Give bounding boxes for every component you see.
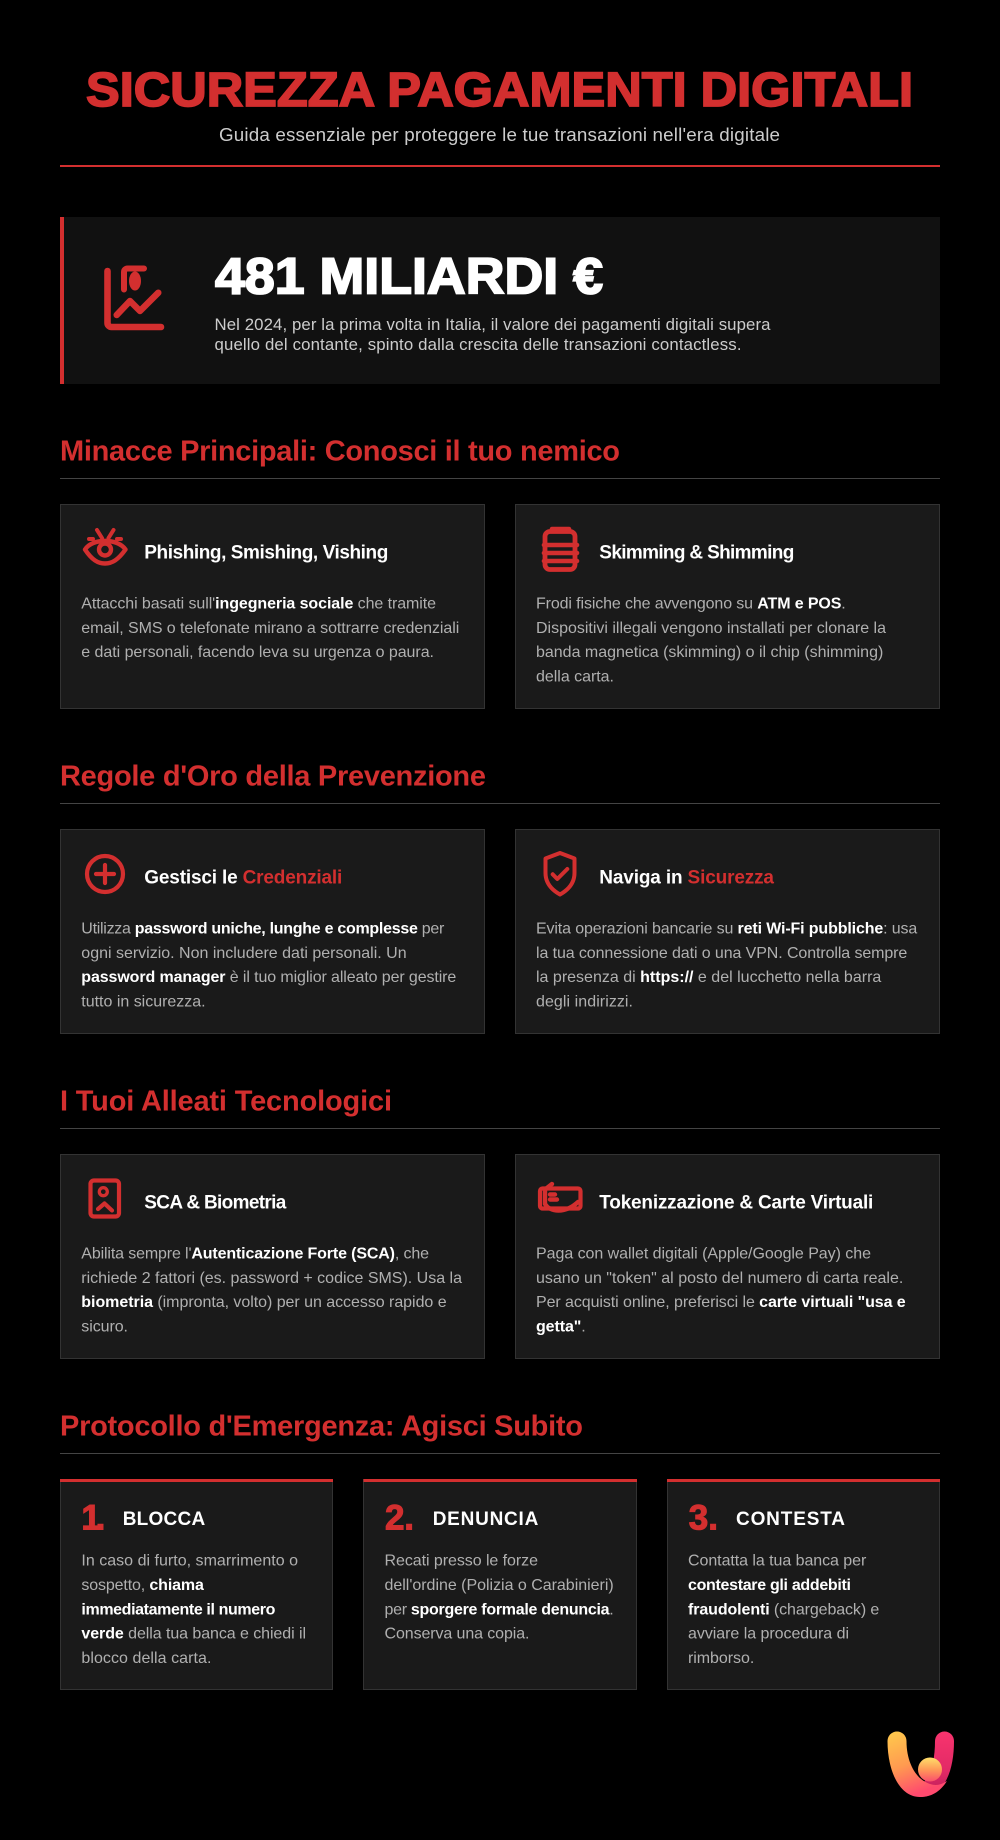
step heading: CONTESTA <box>736 1509 845 1530</box>
step text <box>384 1553 614 1643</box>
step text: avviare la procedura di <box>688 1626 849 1643</box>
panel: step 1 block <box>60 1479 333 1690</box>
step text: blocco della carta. <box>81 1650 211 1667</box>
heading: threats section: Minacce Principali: Conosci il tuo nemico <box>60 436 620 468</box>
card text: email, SMS o telefonate mirano a sottrarre credenziali <box>81 620 459 637</box>
card text <box>81 596 459 661</box>
header <box>60 64 940 167</box>
subtitle: Guida essenziale per proteggere le tue transazioni nell'era digitale <box>219 124 780 145</box>
icon: biometric badge <box>90 1180 119 1216</box>
heading: emergency section: Protocollo d'Emergenza: Agisci Subito <box>60 1410 583 1442</box>
step text: In caso di furto, smarrimento o <box>81 1553 298 1570</box>
icon: eye <box>85 530 126 564</box>
step text: fraudolenti (chargeback) e <box>688 1601 879 1618</box>
heading: prevention section: Regole d'Oro della Prevenzione <box>60 760 486 792</box>
card text: della carta. <box>536 668 614 685</box>
step number: 1. <box>81 1498 105 1538</box>
card heading: Gestisci le Credenziali <box>144 867 342 888</box>
step text <box>688 1553 879 1667</box>
card heading: Tokenizzazione & Carte Virtuali <box>599 1192 873 1213</box>
heading: technology section: I Tuoi Alleati Tecnologici <box>60 1086 392 1118</box>
card text: biometria (impronta, volto) per un accesso rapido e <box>81 1294 447 1311</box>
statistic value: 481 MILIARDI € <box>215 248 603 304</box>
card text: Paga con wallet digitali (Apple/Google Pay) che <box>536 1246 871 1262</box>
step heading: DENUNCIA <box>433 1509 539 1530</box>
card heading: Naviga in Sicurezza <box>599 867 774 888</box>
card heading: SCA & Biometria <box>144 1192 287 1213</box>
card text <box>536 1246 906 1335</box>
step text: verde della tua banca e chiedi il <box>81 1626 306 1643</box>
card text: sicuro. <box>81 1318 128 1335</box>
card text <box>536 920 917 1010</box>
card heading: Phishing, Smishing, Vishing <box>144 542 388 563</box>
card text: getta". <box>536 1318 586 1335</box>
panel: skimming <box>516 504 940 708</box>
step text: Recati presso le forze <box>384 1553 538 1570</box>
card text <box>81 920 456 1010</box>
card text: usano un "token" al posto del numero di carta reale. <box>536 1270 903 1287</box>
card text: Frodi fisiche che avvengono su ATM e POS. <box>536 596 846 612</box>
card text: Evita operazioni bancarie su reti Wi-Fi pubbliche: usa <box>536 920 917 938</box>
card text: Abilita sempre l'Autenticazione Forte (SCA), che <box>81 1246 429 1262</box>
card text: banda magnetica (skimming) o il chip (shimming) <box>536 644 883 661</box>
card text: richiede 2 fattori (es. password + codice SMS). Usa la <box>81 1270 462 1287</box>
icon: skimmer <box>544 529 577 570</box>
step text: dell'ordine (Polizia o Carabinieri) <box>384 1577 614 1594</box>
step heading: BLOCCA <box>123 1509 205 1530</box>
icon: growth chart <box>108 268 161 327</box>
step text: Conserva una copia. <box>384 1626 530 1643</box>
card text: tutto in sicurezza. <box>81 993 206 1010</box>
card text: Attacchi basati sull'ingegneria sociale che tramite <box>81 596 436 612</box>
statistic description: Nel 2024, per la prima volta in Italia, il valore dei pagamenti digitali supera <box>214 315 771 334</box>
step text: immediatamente il numero <box>81 1601 276 1618</box>
panel: SCA and biometrics <box>60 1154 484 1358</box>
card text: degli indirizzi. <box>536 993 633 1010</box>
statistic description: quello del contante, spinto dalla crescita delle transazioni contactless. <box>214 335 742 354</box>
panel: phishing <box>60 504 484 708</box>
icon: plus circle <box>87 856 123 892</box>
step text: sospetto, chiama <box>81 1577 204 1594</box>
card text: ogni servizio. Non includere dati personali. Un <box>81 945 407 962</box>
step text: Contatta la tua banca per <box>688 1553 867 1570</box>
step text: contestare gli addebiti <box>688 1577 851 1594</box>
panel: step 3 dispute <box>667 1479 940 1690</box>
card text <box>81 1246 462 1335</box>
panel: hero statistic <box>60 217 940 384</box>
card text: Dispositivi illegali vengono installati per clonare la <box>536 620 886 637</box>
card text: Utilizza password uniche, lunghe e complesse per <box>81 920 445 938</box>
icon: shield <box>546 853 574 894</box>
card text: la presenza di https:// e del lucchetto nella barra <box>536 969 881 986</box>
step text: rimborso. <box>688 1650 754 1667</box>
card text: e dati personali, facendo leva su urgenza o paura. <box>81 644 434 661</box>
panel: tokenization <box>516 1154 940 1358</box>
step number: 2. <box>385 1498 414 1538</box>
card text: Per acquisti online, preferisci le carte virtuali "usa e <box>536 1294 906 1311</box>
icon: virtual card <box>540 1184 580 1210</box>
icon: brand logo <box>888 1732 954 1797</box>
panel: credentials <box>60 830 484 1034</box>
step number: 3. <box>689 1498 718 1538</box>
step text <box>81 1553 306 1667</box>
card text: la tua connessione dati o una VPN. Controlla sempre <box>536 945 907 962</box>
card text: password manager è il tuo miglior alleato per gestire <box>81 969 456 986</box>
step text: per sporgere formale denuncia. <box>384 1601 614 1618</box>
panel: step 2 report <box>364 1479 637 1690</box>
panel: safe browsing <box>516 830 940 1034</box>
card heading: Skimming & Shimming <box>599 542 794 563</box>
statistic description <box>214 315 771 354</box>
card text <box>536 596 886 685</box>
title: SICUREZZA PAGAMENTI DIGITALI <box>86 64 913 117</box>
